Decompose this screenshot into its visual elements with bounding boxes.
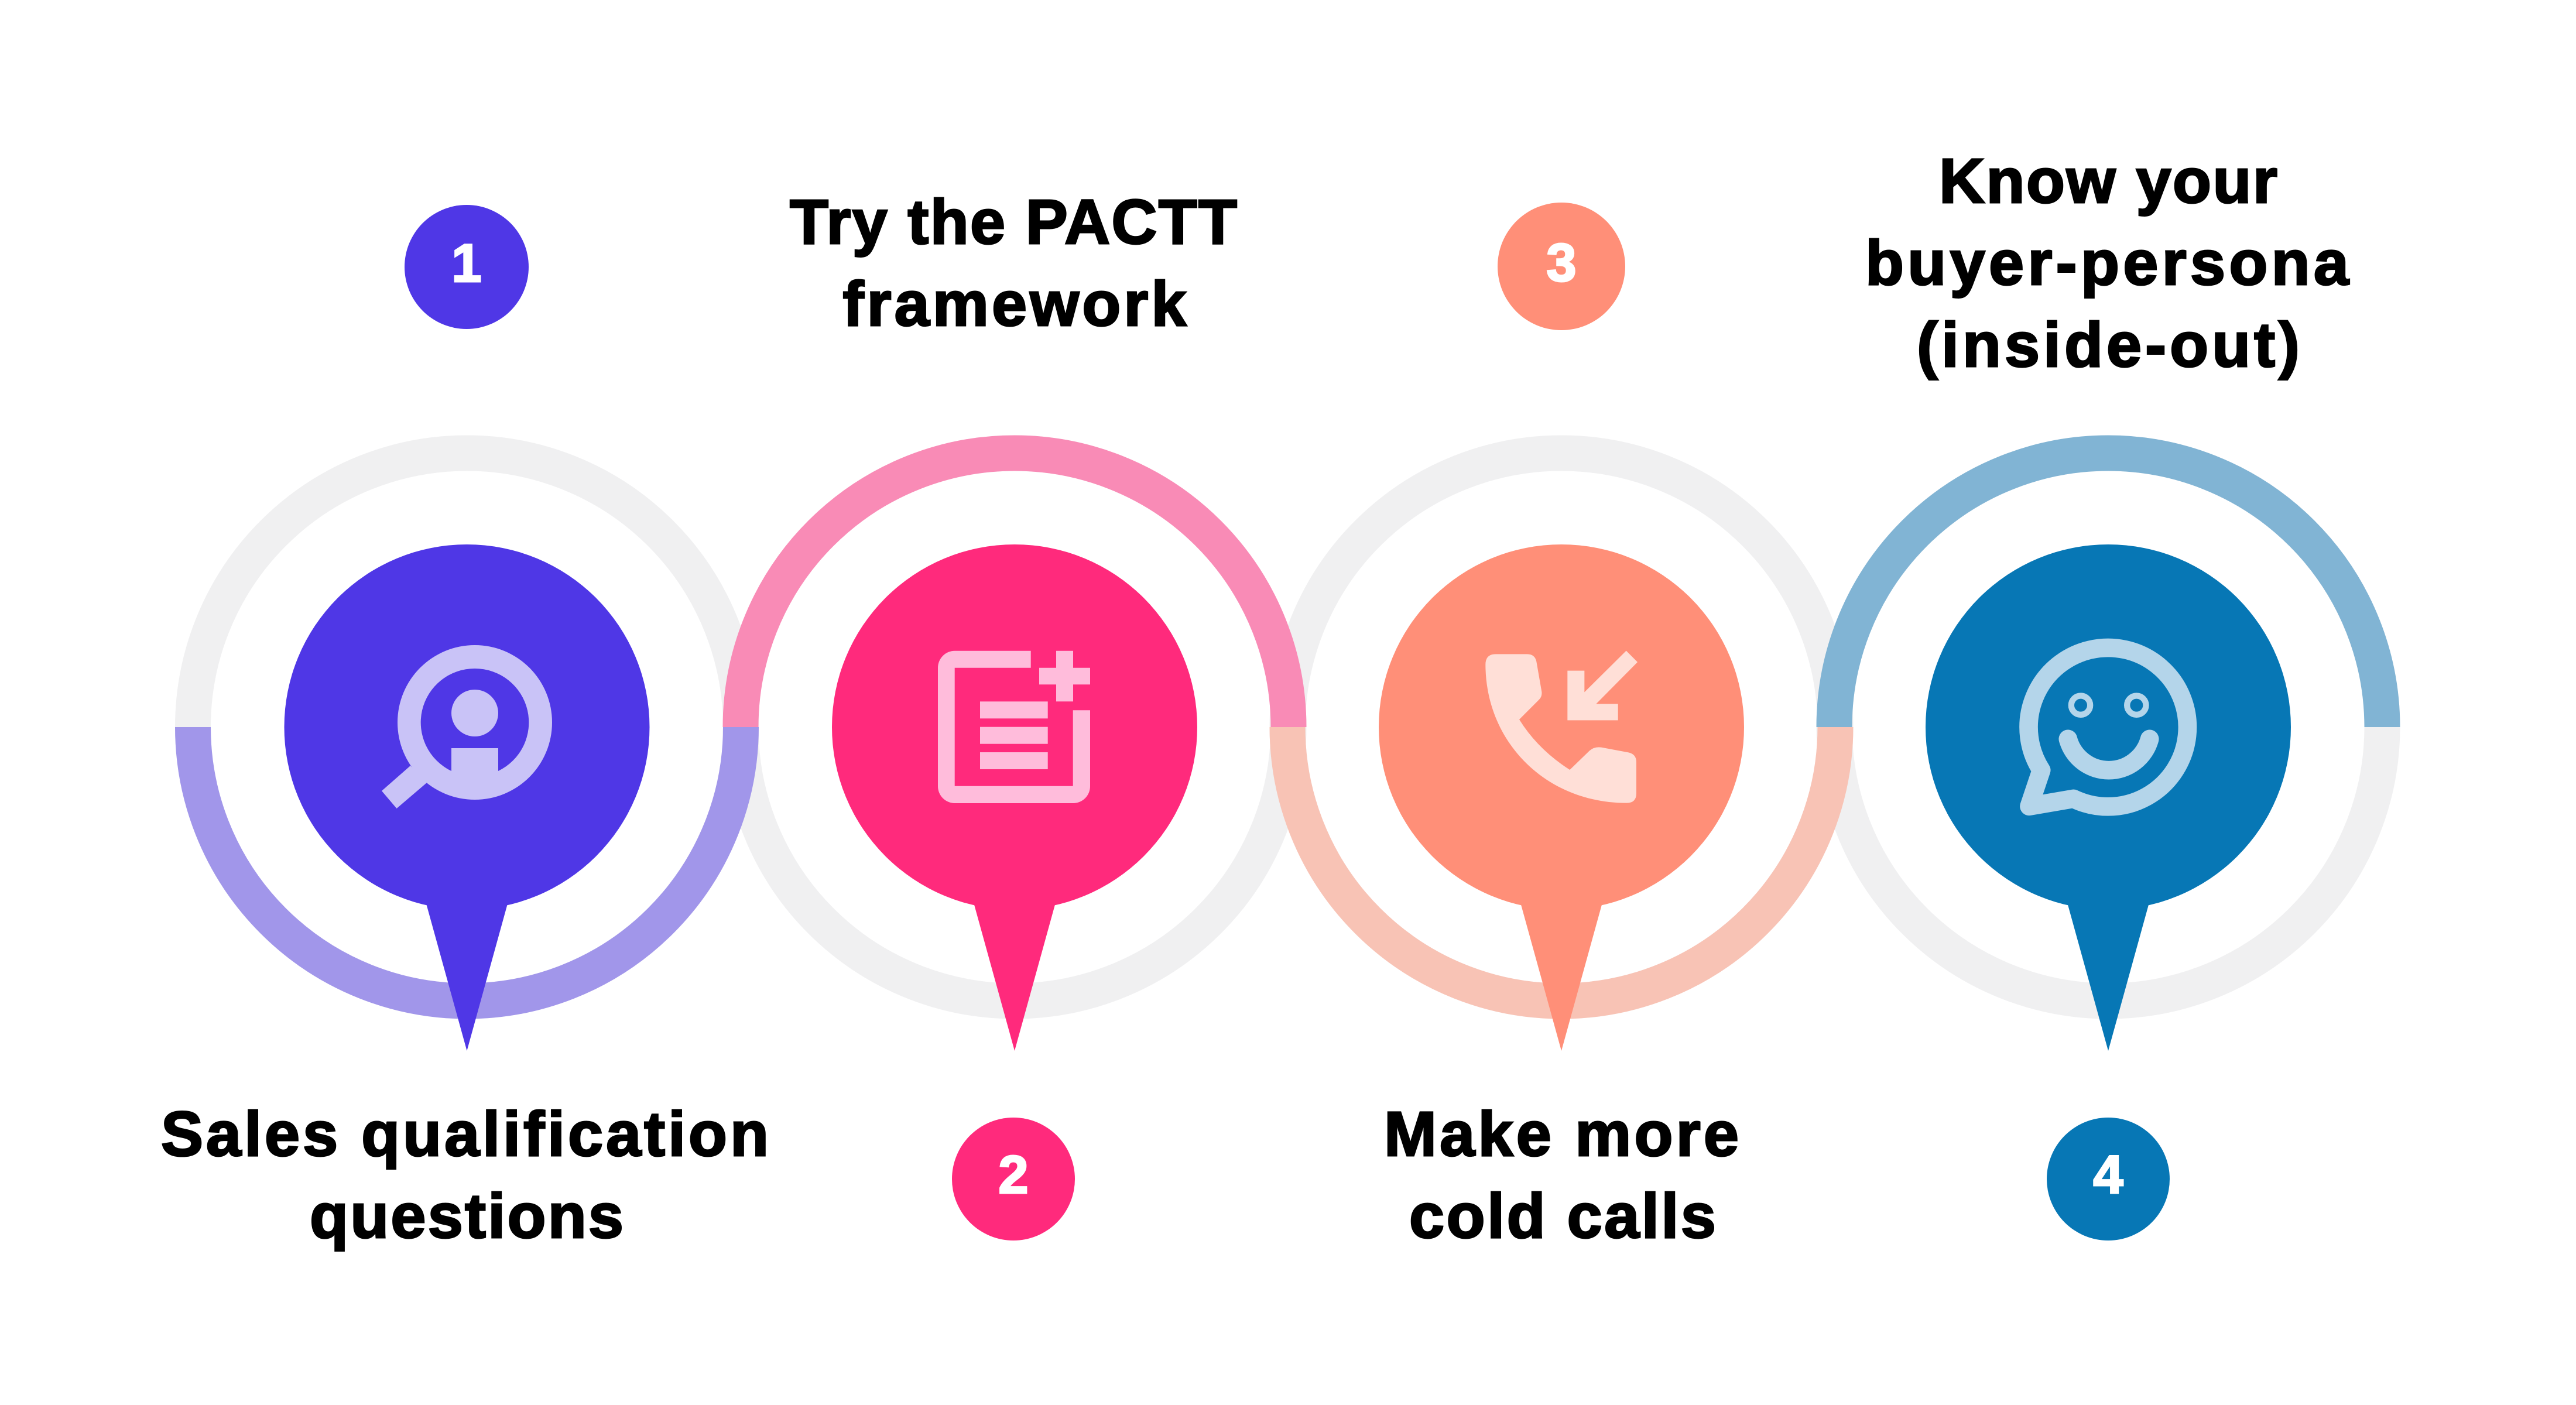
- pin 3: salmon: [1379, 544, 1744, 1051]
- text: Sales qualification questions: questions: [310, 1180, 624, 1251]
- badge 1: [405, 205, 529, 329]
- text: Try the PACTT framework: framework: [843, 268, 1187, 339]
- text: Make more cold calls: Make more: [1384, 1098, 1739, 1169]
- text: Know your buyer-persona (inside-out): (inside-out): [1917, 309, 2300, 380]
- badge 2: [952, 1118, 1075, 1240]
- badge 4: [2047, 1118, 2170, 1240]
- text: Try the PACTT framework: [790, 186, 1237, 339]
- text: Sales qualification questions: [161, 1098, 769, 1251]
- icon: magnifier with person: [382, 645, 552, 808]
- badge 1: 1: [451, 234, 482, 293]
- icon: smiley speech bubble: [2029, 648, 2187, 807]
- badge 3: [1498, 203, 1625, 330]
- grey background rings: [193, 453, 2382, 1001]
- text: Know your buyer-persona (inside-out): Know your: [1939, 145, 2277, 216]
- ring arc 2: pink upper half: [741, 453, 1289, 727]
- badge 3: 3: [1546, 233, 1577, 293]
- icon: incoming phone call: [1485, 651, 1638, 803]
- pin 1: purple: [285, 544, 650, 1051]
- badge 4: 4: [2093, 1145, 2123, 1205]
- ring arc 3: salmon lower half: [1287, 727, 1835, 1001]
- ring arc 4: blue upper half: [1834, 453, 2382, 727]
- text: Try the PACTT framework: Try the PACTT: [790, 186, 1237, 257]
- icon: document with plus: [938, 651, 1090, 803]
- pin 4: blue: [1926, 544, 2291, 1051]
- text: Know your buyer-persona (inside-out): [1865, 145, 2349, 380]
- text: Make more cold calls: cold calls: [1409, 1180, 1716, 1251]
- text: Make more cold calls: [1384, 1098, 1739, 1251]
- text: Sales qualification questions: Sales qualification: [161, 1098, 769, 1169]
- ring arc 1: purple lower half: [193, 727, 741, 1001]
- pin 2: pink: [832, 544, 1197, 1051]
- text: Know your buyer-persona (inside-out): buyer-persona: [1865, 227, 2349, 298]
- badge 2: 2: [998, 1145, 1029, 1205]
